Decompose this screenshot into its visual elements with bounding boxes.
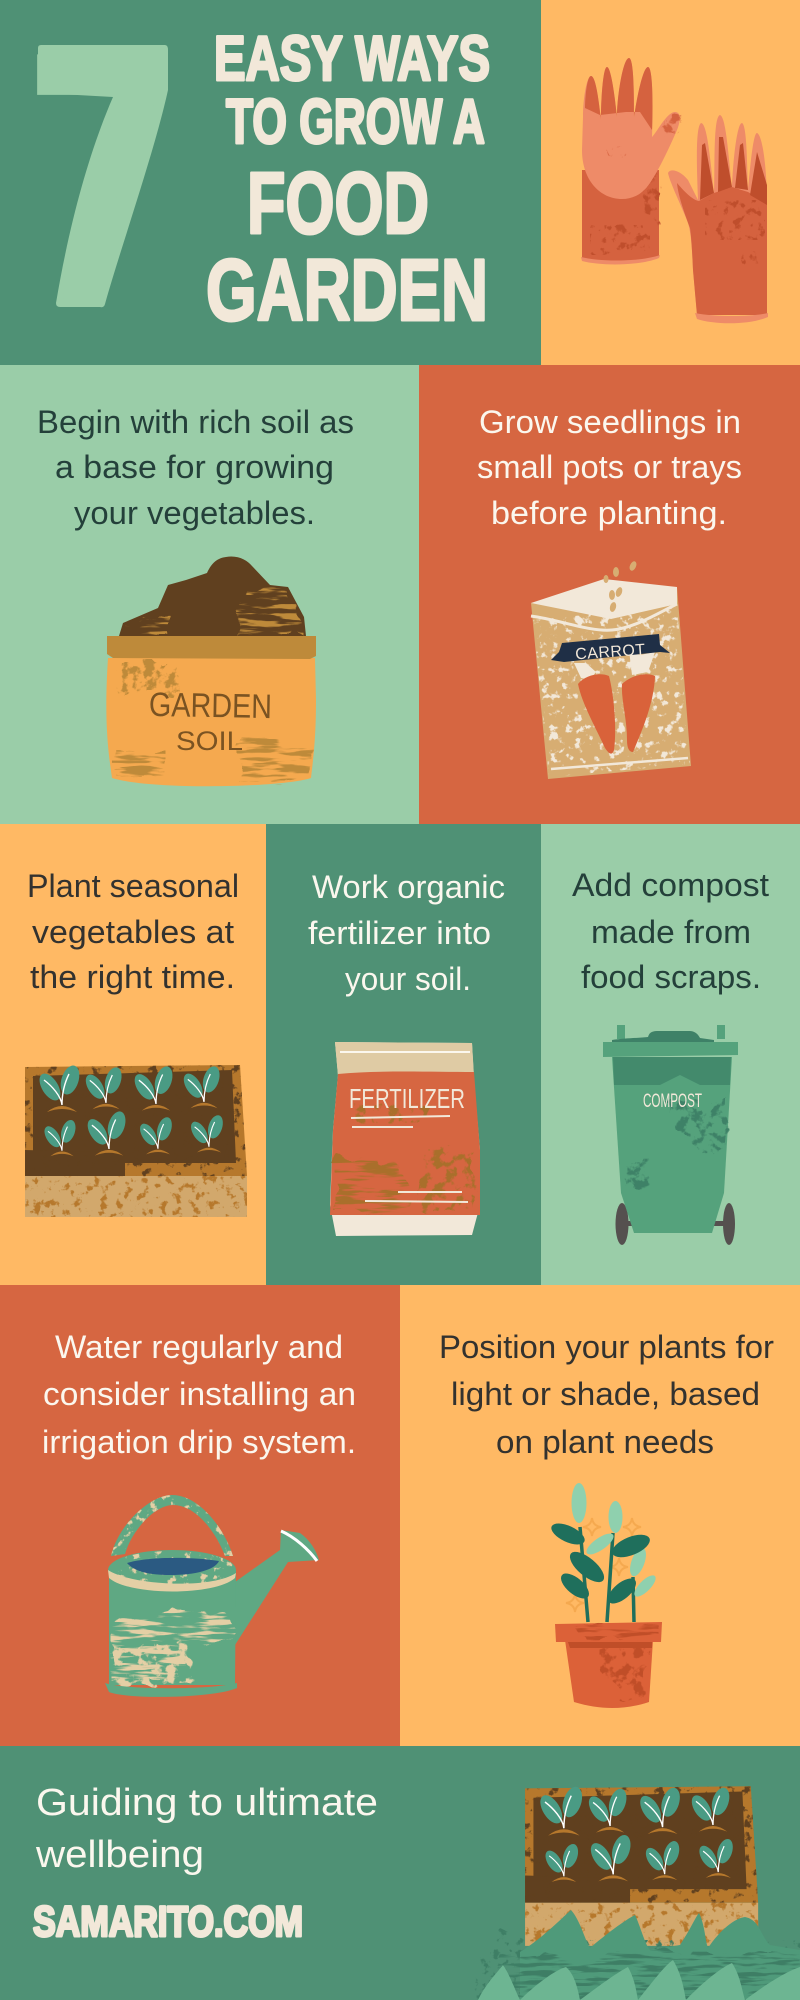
icon: right glove bbox=[668, 115, 768, 323]
panel: fertilizer bbox=[266, 824, 541, 1285]
step text: vegetables: the right time. bbox=[30, 959, 235, 995]
step text: vegetables bbox=[27, 868, 239, 995]
footer website: SAMARITO.COM bbox=[33, 1898, 303, 1946]
panel: watering bbox=[0, 1285, 400, 1746]
icon: fertilizer bag bbox=[330, 1042, 480, 1236]
step text: light: on plant needs bbox=[496, 1424, 714, 1460]
icon: watering can bbox=[105, 1495, 319, 1697]
panel: title bbox=[0, 0, 541, 379]
panel: seedlings bbox=[419, 365, 800, 824]
step text: soil: a base for growing bbox=[55, 449, 334, 485]
heading: EASY WAYS bbox=[214, 24, 490, 94]
heading bbox=[206, 24, 490, 339]
step text: fertilizer: fertilizer into bbox=[308, 915, 491, 951]
panel: compost bbox=[541, 824, 800, 1285]
heading: FOOD bbox=[247, 155, 429, 252]
icon: garden soil sack bbox=[106, 557, 316, 786]
step text: seedlings bbox=[477, 404, 742, 531]
step text: seedlings: Grow seedlings in bbox=[479, 404, 741, 440]
step text: light: Position your plants for bbox=[439, 1329, 774, 1365]
icon: carrot seed packet bbox=[531, 560, 691, 779]
heading: TO GROW A bbox=[226, 87, 485, 157]
step text: compost: food scraps. bbox=[581, 959, 761, 995]
footer tagline: Guiding to ultimate bbox=[36, 1782, 378, 1824]
step text: soil: your vegetables. bbox=[74, 495, 315, 531]
icon: carrot seed packet: CARROT bbox=[575, 642, 646, 663]
step text: soil: Begin with rich soil as bbox=[37, 404, 354, 440]
icon: left glove bbox=[581, 58, 680, 264]
icon: garden soil sack: SOIL bbox=[176, 726, 243, 756]
step text: watering bbox=[42, 1329, 356, 1460]
step text: watering: irrigation drip system. bbox=[42, 1424, 356, 1460]
panel: rich soil bbox=[0, 365, 419, 824]
step text: fertilizer: Work organic bbox=[312, 869, 505, 905]
icon: compost bin: COMPOST bbox=[643, 1091, 702, 1112]
icon: planting bed with foliage bbox=[474, 1784, 800, 2000]
step text: fertilizer bbox=[308, 869, 505, 997]
icon: compost bin bbox=[603, 1025, 738, 1245]
step text: seedlings: before planting. bbox=[491, 495, 727, 531]
icon: garden soil sack: GARDEN bbox=[149, 686, 272, 726]
step text: seedlings: small pots or trays bbox=[477, 449, 742, 485]
step text: compost: Add compost bbox=[572, 867, 769, 903]
panel: footer bbox=[0, 1746, 800, 2000]
step text: light: light or shade, based bbox=[451, 1376, 760, 1412]
footer tagline bbox=[35, 1782, 378, 1876]
step text: light bbox=[439, 1329, 774, 1460]
panel: gloves bbox=[541, 0, 800, 365]
step text: soil bbox=[37, 404, 354, 531]
panel: light and shade bbox=[400, 1285, 800, 1746]
footer tagline: wellbeing bbox=[35, 1834, 204, 1876]
icon: potted plant bbox=[548, 1483, 662, 1708]
step text: compost bbox=[572, 867, 769, 995]
step text: watering: consider installing an bbox=[43, 1376, 356, 1412]
step text: vegetables: Plant seasonal bbox=[27, 868, 239, 904]
step text: watering: Water regularly and bbox=[55, 1329, 343, 1365]
icon: planting bed bbox=[25, 1063, 247, 1217]
heading: GARDEN bbox=[206, 242, 488, 339]
step text: compost: made from bbox=[591, 914, 751, 950]
panel: seasonal vegetables bbox=[0, 824, 266, 1285]
icon: fertilizer bag: FERTILIZER bbox=[349, 1083, 465, 1114]
step text: vegetables: vegetables at bbox=[32, 914, 234, 950]
step text: fertilizer: your soil. bbox=[345, 961, 471, 997]
